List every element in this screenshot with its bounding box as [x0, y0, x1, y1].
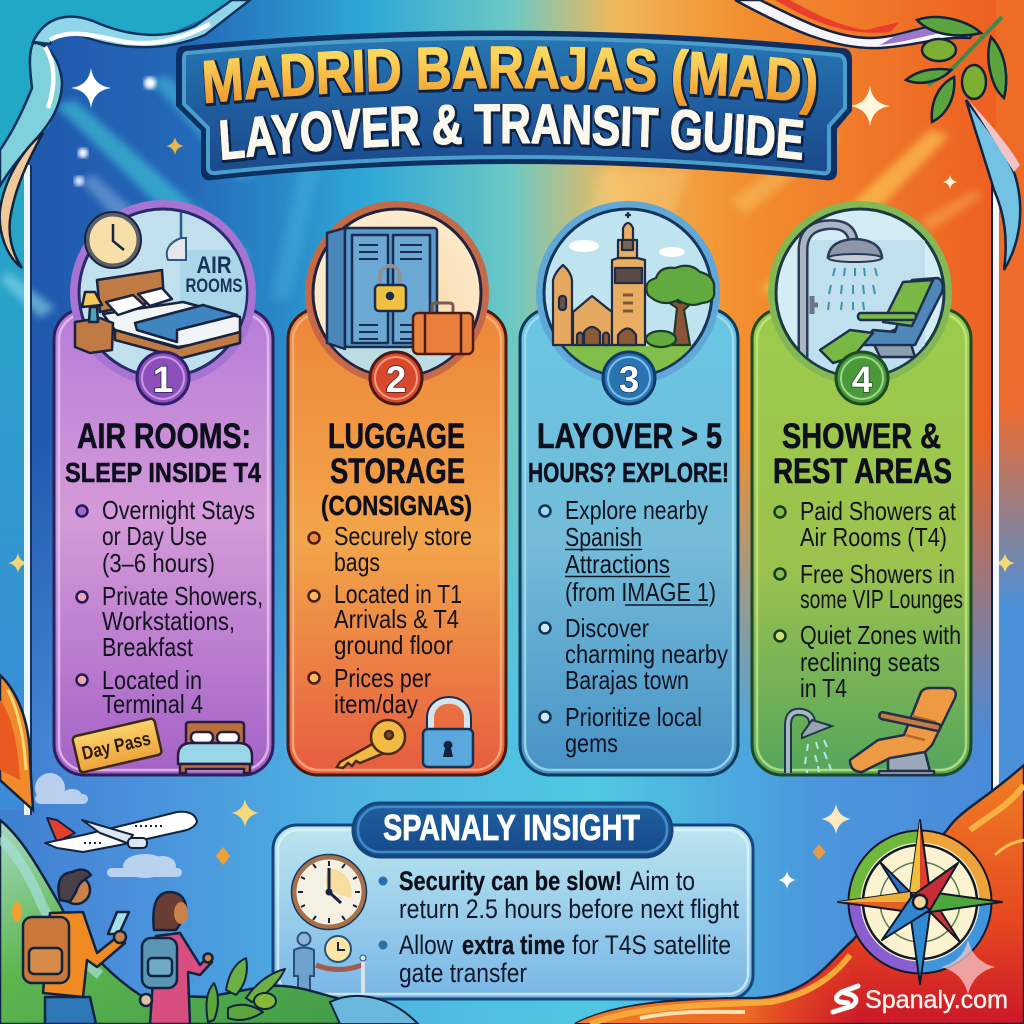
insight text: Security can be slow! — [399, 866, 622, 896]
icon: day pass ticket — [72, 718, 162, 773]
frame — [27, 165, 996, 815]
list 3: gems — [565, 728, 618, 758]
insight text: for T4S satellite — [572, 930, 731, 960]
insight text — [378, 866, 739, 988]
insight text: gate transfer — [399, 958, 527, 988]
panel 4: shower and rest — [752, 201, 971, 775]
heading 3: LAYOVER > 5 — [537, 417, 722, 456]
list 2: ground floor — [334, 630, 453, 660]
icon: bed — [75, 270, 240, 358]
list 4: Paid Showers at — [800, 496, 957, 526]
list 1: Located in — [102, 665, 202, 695]
badge 4: 4 — [852, 359, 873, 400]
insight text: Aim to — [630, 866, 695, 896]
corner ribbon: top right — [735, 0, 1020, 270]
list 1: Breakfast — [102, 632, 194, 662]
list 4: Free Showers in — [800, 559, 955, 589]
insight text: Allow — [399, 930, 453, 960]
air rooms sign — [186, 252, 242, 297]
heading 2: (CONSIGNAS) — [321, 490, 472, 521]
list 2: Located in T1 — [334, 579, 462, 609]
list 2 — [308, 521, 472, 719]
list 3: Barajas town — [565, 665, 689, 695]
list 4: Air Rooms (T4) — [800, 522, 947, 552]
icon: olive sprig — [206, 958, 285, 1022]
icon circle 1: bed — [70, 200, 256, 386]
badge 2: 2 — [386, 359, 406, 400]
list 2: Securely store — [334, 521, 472, 551]
list 1: Overnight Stays — [102, 495, 255, 525]
title banner — [176, 30, 852, 180]
insight heading: SPANALY INSIGHT — [383, 807, 640, 848]
icon: recliner — [820, 278, 943, 363]
heading 4: REST AREAS — [773, 452, 952, 491]
badge 3: 3 — [619, 359, 639, 400]
logo mark — [833, 986, 858, 1012]
icon circle 2: lockers — [305, 201, 489, 385]
heading 1: SLEEP INSIDE T4 — [65, 457, 261, 488]
icon: wall clock — [85, 212, 141, 268]
list 4: reclining seats — [800, 647, 940, 677]
heading 2: STORAGE — [330, 452, 465, 491]
list 1: (3–6 hours) — [102, 548, 215, 578]
landscape: right orange wave — [575, 765, 1024, 1024]
title line 1: MADRID BARAJAS (MAD) — [203, 46, 818, 118]
icon: shower — [803, 225, 882, 360]
list 3 — [540, 495, 728, 758]
badge 4 — [836, 352, 888, 404]
list 2: Arrivals & T4 — [334, 604, 459, 634]
list 3: Attractions — [565, 549, 670, 579]
illustration: man with backpack — [23, 870, 129, 1024]
badge 3 — [603, 352, 655, 404]
insight text: return 2.5 hours before next flight — [399, 894, 739, 924]
icon: large clock — [292, 854, 366, 930]
insight panel — [273, 803, 753, 999]
panel 3: layover explore — [520, 201, 738, 775]
list 3: Prioritize local — [565, 702, 702, 732]
list 4: in T4 — [800, 673, 847, 703]
icon: compass — [838, 820, 1002, 984]
list 2: bags — [334, 547, 380, 577]
list 3: Discover — [565, 613, 649, 643]
icon: olive branch — [906, 17, 1006, 122]
air rooms sign: AIR — [196, 252, 232, 279]
icon circle 4: shower and recliner — [768, 201, 952, 385]
icon: orange recliner — [850, 688, 956, 775]
pale sparkle — [941, 940, 995, 994]
list 2: Prices per — [334, 663, 431, 693]
landscape: left hills — [0, 820, 418, 1024]
logo: spanaly.com: Spanaly.com — [865, 986, 1008, 1014]
list 1: Terminal 4 — [102, 689, 203, 719]
icon: padlock — [423, 697, 473, 767]
icon: small bed — [178, 722, 252, 773]
icon: queue at security — [294, 932, 366, 996]
badge 1 — [137, 352, 189, 404]
list 2: item/day — [334, 689, 418, 719]
icon: small shower — [788, 712, 832, 773]
list 1 — [76, 495, 263, 719]
title line 2: LAYOVER & TRANSIT GUIDE — [220, 104, 806, 163]
heading 3 — [528, 417, 729, 488]
heading 4 — [773, 417, 952, 491]
icon: locker — [327, 228, 437, 349]
heading 3: HOURS? EXPLORE! — [528, 457, 729, 488]
panel 1: air rooms — [54, 200, 273, 775]
insight text: extra time — [462, 930, 565, 960]
list 4 — [774, 496, 963, 703]
heading 4: SHOWER & — [782, 417, 941, 456]
clouds — [35, 773, 182, 878]
icon circle 3: spanish landmarks — [536, 201, 720, 385]
air rooms sign: ROOMS — [186, 276, 242, 297]
heading 1 — [65, 417, 261, 488]
list 1: or Day Use — [102, 521, 207, 551]
list 4: some VIP Lounges — [800, 584, 963, 614]
icon: key — [337, 720, 405, 768]
badge 1: 1 — [153, 359, 173, 400]
list 3: Spanish — [565, 522, 642, 552]
heading 1: AIR ROOMS: — [77, 417, 251, 456]
left corner ribbon — [0, 675, 33, 810]
heading 2: LUGGAGE — [328, 417, 465, 456]
insight heading — [353, 803, 672, 857]
list 1: Workstations, — [102, 606, 235, 636]
heading 2 — [321, 417, 472, 521]
list 3: charming nearby — [565, 639, 728, 669]
list 4: Quiet Zones with — [800, 620, 961, 650]
icon: cathedral and tower — [553, 212, 645, 345]
panel 2: luggage storage — [288, 201, 506, 775]
corner ribbon: top left — [0, 0, 250, 268]
icon: airplane — [45, 812, 197, 852]
badge 2 — [370, 352, 422, 404]
icon: suitcase — [413, 303, 473, 354]
list 3: Explore nearby — [565, 495, 708, 525]
illustration: woman with backpack — [140, 892, 212, 1024]
icon: tree — [646, 266, 714, 347]
sparkles — [8, 68, 1015, 889]
icon: day pass ticket: Day Pass — [80, 729, 153, 765]
list 3: (from IMAGE 1) — [565, 577, 716, 607]
list 1: Private Showers, — [102, 581, 263, 611]
